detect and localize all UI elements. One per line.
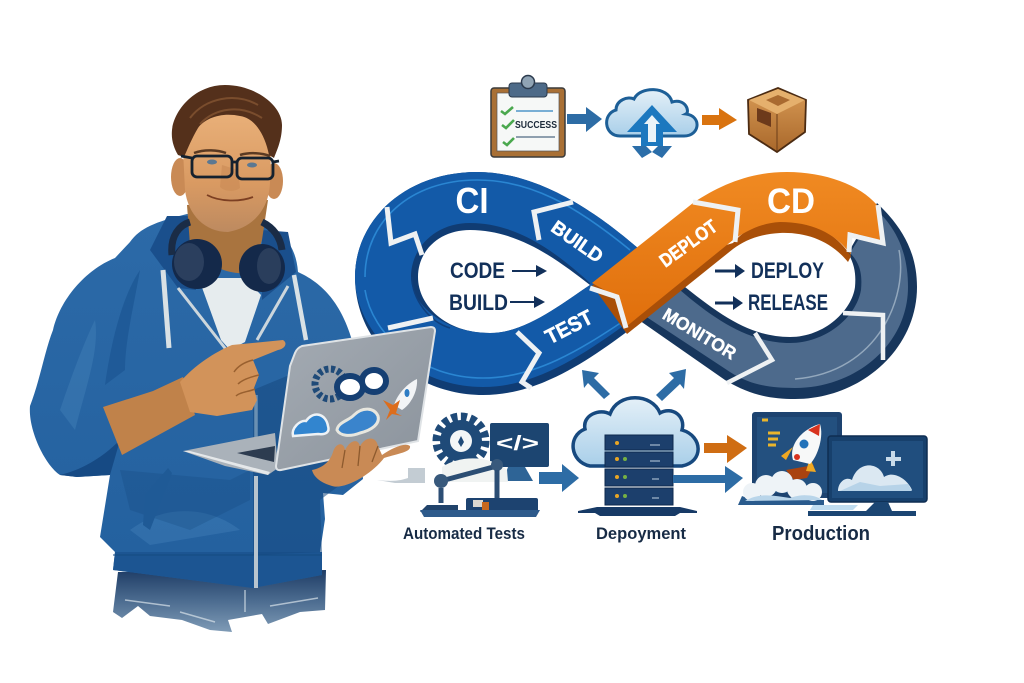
CD loop band	[636, 203, 917, 399]
right loop text: deploy and release	[715, 258, 828, 315]
label: production: Production	[772, 523, 870, 545]
right loop text: deploy and release: RELEASE	[748, 290, 828, 315]
forearm and pointing hand	[103, 340, 285, 455]
face	[183, 112, 271, 232]
label: deployment: Depoyment	[596, 524, 686, 543]
label: CD: CD	[767, 182, 815, 221]
deploy orange band	[590, 172, 883, 334]
launch clouds	[738, 471, 824, 505]
laptop	[183, 327, 435, 475]
eyebrows	[194, 150, 270, 156]
infinity loop diagram	[355, 172, 917, 399]
sticker: map cloud	[337, 409, 378, 435]
icon: package box	[748, 88, 806, 152]
arrow: deployment to production blue	[673, 466, 743, 493]
sticker: gear and infinity	[315, 369, 386, 399]
headphones	[172, 222, 285, 292]
sticker: rocket	[383, 379, 417, 420]
arrow: clipboard to cloud	[567, 107, 602, 132]
icon: cloud	[573, 398, 698, 466]
hand under laptop	[312, 438, 410, 487]
arrows: cloud up to the loop	[582, 369, 686, 401]
neck	[187, 200, 268, 273]
label: CI: CI	[456, 180, 488, 221]
icon: success clipboard: SUCCESS	[515, 120, 557, 131]
hoodie body	[30, 214, 363, 588]
CI loop band	[355, 172, 640, 395]
person	[30, 85, 435, 632]
bottom flow: production	[738, 412, 927, 545]
bottom flow: deployment	[573, 398, 698, 543]
arrow: cloud to package	[702, 108, 737, 130]
hair	[172, 85, 282, 158]
smile	[207, 195, 253, 201]
icon: gear	[437, 417, 485, 465]
label: TEST: TEST	[542, 306, 597, 349]
rocket	[781, 424, 821, 480]
icon: back monitor with rocket	[738, 412, 842, 505]
label: BUILD: BUILD	[547, 217, 606, 268]
sticker: cloud	[293, 415, 329, 436]
icon: code monitor	[490, 423, 549, 481]
icon: cloud upload	[607, 90, 697, 158]
head	[171, 85, 283, 232]
t-shirt	[200, 278, 261, 350]
jeans	[113, 570, 326, 632]
label: DEPLOT: DEPLOT	[656, 216, 722, 272]
icon: code monitor: </>	[496, 433, 539, 455]
smudge	[377, 468, 425, 483]
eyes	[207, 160, 257, 168]
icon: front monitor	[808, 436, 927, 516]
left loop text: code and build	[449, 258, 547, 315]
glasses	[181, 156, 279, 179]
left loop text: code and build: BUILD	[449, 290, 508, 315]
icon: success clipboard	[491, 76, 565, 157]
left loop text: code and build: CODE	[450, 258, 505, 283]
collar zips and drawstrings	[178, 286, 288, 352]
ears	[171, 158, 189, 196]
icon: server rack	[578, 435, 697, 516]
icon: robot arm	[420, 458, 540, 517]
label: MONITOR: MONITOR	[659, 304, 740, 364]
zipper	[254, 395, 258, 437]
right loop text: deploy and release: DEPLOY	[751, 258, 824, 283]
arrow: deployment to production orange	[704, 435, 747, 463]
label: automated tests: Automated Tests	[403, 524, 525, 543]
top flow: success to cloud to package	[491, 76, 806, 158]
arrow: tests to deployment	[539, 464, 579, 492]
bottom flow: automated tests	[377, 417, 549, 543]
